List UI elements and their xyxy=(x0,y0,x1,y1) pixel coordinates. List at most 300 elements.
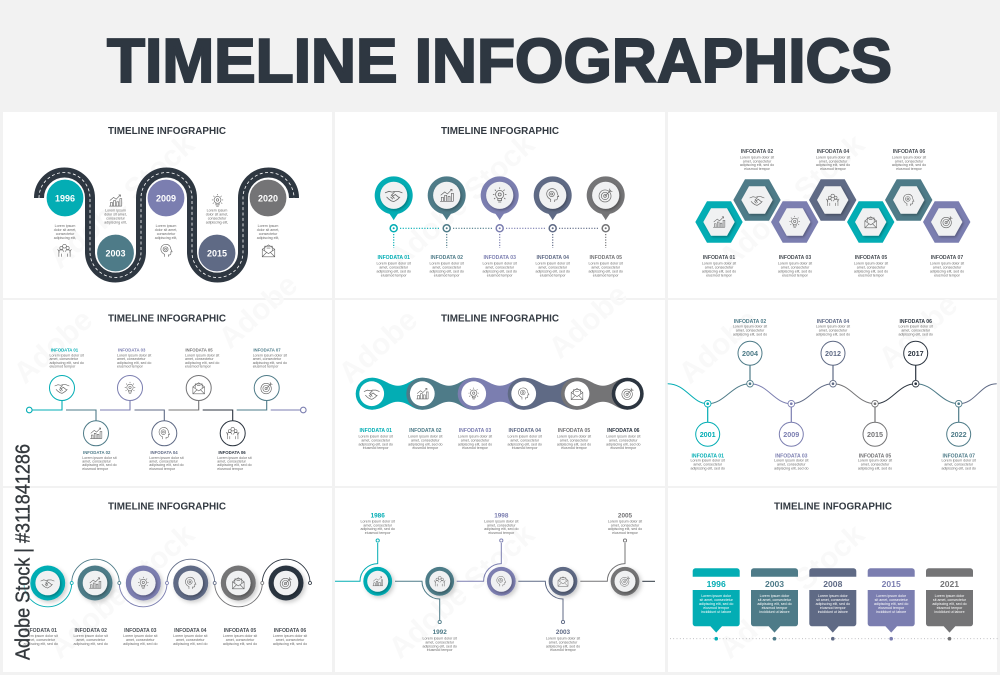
card 5: sit amet, consectetur xyxy=(933,598,967,602)
panel: stepped line timeline xyxy=(3,268,332,486)
infodata labels: INFODATA 01 xyxy=(24,628,57,634)
text blocks: Lorem ipsum dolor sit xyxy=(50,354,84,358)
infodata labels xyxy=(377,255,622,261)
text blocks: amet, consectetur xyxy=(861,463,890,467)
infodata labels: INFODATA 04 xyxy=(508,428,541,434)
timeline nodes xyxy=(390,225,609,232)
text blocks: Lorem ipsum dolor sit xyxy=(854,262,888,266)
text blocks: eiusmod tempor xyxy=(934,274,961,278)
card 1: sit amet, consectetur xyxy=(700,598,734,602)
infodata labels: INFODATA 01 xyxy=(51,348,79,353)
text blocks: adipiscing elit, sed do xyxy=(606,442,640,446)
infodata labels: INFODATA 02 xyxy=(741,149,773,155)
year circles xyxy=(696,341,971,446)
text blocks: Lorem ipsum dolor sit xyxy=(778,262,812,266)
text blocks: Lorem ipsum dolor sit xyxy=(24,634,58,638)
stepped line segments xyxy=(32,401,300,421)
text blocks: adipiscing elit, sed do xyxy=(117,361,151,365)
stems xyxy=(708,365,959,422)
text blocks xyxy=(702,156,964,278)
text blocks: adipiscing elit, sed do xyxy=(892,163,926,167)
text blocks: adipiscing elit, xyxy=(155,236,177,240)
text blocks: eiusmod tempor xyxy=(185,365,212,369)
text blocks: Lorem ipsum dolor sit xyxy=(733,324,767,328)
text blocks: Lorem ipsum dolor sit xyxy=(899,324,933,328)
year labels: 2015 xyxy=(207,248,227,258)
text blocks: Lorem ipsum dolor sit xyxy=(149,456,184,460)
text blocks: Lorem ipsum xyxy=(258,224,278,228)
infodata labels: INFODATA 06 xyxy=(218,450,246,455)
text blocks: amet, consectetur xyxy=(819,328,848,332)
text blocks: amet, consectetur xyxy=(425,640,455,644)
text blocks: adipiscing elit, sed do xyxy=(930,270,964,274)
text blocks: Lorem ipsum dolor sit xyxy=(223,634,257,638)
card 2: incididunt ut labore xyxy=(759,610,790,614)
text blocks: adipiscing elit, sed do xyxy=(608,527,642,531)
heading: TIMELINE INFOGRAPHIC xyxy=(108,500,226,512)
text blocks: Lorem ipsum dolor sit xyxy=(359,434,393,438)
text blocks: Lorem ipsum dolor sit xyxy=(423,637,457,641)
text blocks: consectetur xyxy=(208,216,227,220)
panel: wave timeline: Adobe xyxy=(873,288,964,375)
card 1: 1996 xyxy=(707,579,726,589)
text blocks: adipiscing elit, sed do xyxy=(430,270,464,274)
text blocks: adipiscing elit, xyxy=(54,236,76,240)
heading: TIMELINE INFOGRAPHIC xyxy=(774,500,892,512)
text blocks: eiusmod tempor xyxy=(612,531,639,535)
chain link 1 xyxy=(356,378,422,410)
text blocks xyxy=(54,208,279,240)
text blocks: dolor sit amet, xyxy=(206,212,228,216)
stock watermark id: Adobe Stock | #311841286 xyxy=(12,444,34,660)
title: TIMELINE INFOGRAPHICS xyxy=(107,27,892,96)
infodata labels: INFODATA 03 xyxy=(124,628,157,634)
text blocks: amet, consectetur xyxy=(510,438,540,442)
text blocks: Lorem ipsum dolor sit xyxy=(253,354,287,358)
card 1 xyxy=(693,568,740,640)
card 3 xyxy=(809,568,856,640)
card 4 xyxy=(868,568,915,640)
panel: chain timeline: Adobe xyxy=(543,278,634,365)
text blocks: dolor sit amet, xyxy=(257,228,279,232)
text blocks: amet, consectetur xyxy=(411,438,440,442)
text blocks: amet, consectetur xyxy=(591,266,621,270)
card 3: eiusmod tempor xyxy=(820,606,846,610)
text blocks: adipiscing elit, sed do xyxy=(458,442,492,446)
text blocks: eiusmod tempor xyxy=(412,446,439,450)
chain link 4 xyxy=(508,378,577,410)
infodata labels: INFODATA 05 xyxy=(589,255,622,261)
wave line xyxy=(668,384,997,404)
text blocks: adipiscing elit, xyxy=(206,220,228,224)
text blocks: adipiscing elit, sed do xyxy=(778,270,812,274)
year labels: 2005 xyxy=(618,513,633,520)
text blocks: Lorem ipsum dolor sit xyxy=(117,354,151,358)
card 5: adipiscing elit, sed do xyxy=(932,602,967,606)
infodata labels xyxy=(24,628,306,634)
card 2: 2003 xyxy=(765,579,784,589)
text blocks: adipiscing elit, sed do xyxy=(24,642,58,646)
text blocks: adipiscing elit, sed do xyxy=(50,361,84,365)
text blocks: Lorem ipsum dolor sit xyxy=(484,520,518,524)
panel: winding road timeline xyxy=(3,112,332,298)
panel: circles with arcs timeline xyxy=(3,488,332,672)
infodata labels: INFODATA 06 xyxy=(899,319,932,325)
text blocks: adipiscing elit, sed do xyxy=(483,270,517,274)
inner discs xyxy=(35,571,298,595)
card 2 xyxy=(751,568,798,640)
chain link 5 xyxy=(561,378,628,410)
text blocks: adipiscing elit, sed do xyxy=(74,642,108,646)
panel: card timeline xyxy=(668,488,998,672)
card 2: Lorem ipsum dolor xyxy=(760,594,790,598)
text blocks: Lorem ipsum dolor sit xyxy=(123,634,157,638)
text blocks: consectetur xyxy=(56,232,75,236)
card 3: adipiscing elit, sed do xyxy=(816,602,850,606)
text blocks: adipiscing elit, sed do xyxy=(508,442,542,446)
text blocks: eiusmod tempor xyxy=(512,446,538,450)
card 5: eiusmod tempor xyxy=(937,606,963,610)
text blocks: amet, consectetur xyxy=(743,159,772,163)
text blocks: eiusmod tempor xyxy=(782,274,809,278)
text blocks: eiusmod tempor xyxy=(427,648,453,652)
text blocks: amet, consectetur xyxy=(781,266,810,270)
text blocks: adipiscing elit, sed do xyxy=(484,527,518,531)
text blocks: amet, consectetur xyxy=(363,523,393,527)
infodata labels: INFODATA 03 xyxy=(459,428,491,434)
text blocks xyxy=(691,324,976,471)
year labels: 1986 xyxy=(371,513,385,520)
text blocks: Lorem ipsum dolor sit xyxy=(273,634,307,638)
text blocks: Lorem ipsum xyxy=(55,224,75,228)
infodata labels: INFODATA 06 xyxy=(893,149,925,155)
infodata labels: INFODATA 06 xyxy=(274,628,306,634)
text blocks: Lorem ipsum dolor sit xyxy=(942,459,976,463)
text blocks: amet, consectetur xyxy=(217,460,247,464)
panel: circles with arcs timeline: Adobe Stock xyxy=(43,518,201,665)
infodata labels: INFODATA 05 xyxy=(855,255,887,261)
year circles xyxy=(46,179,287,272)
text blocks: eiusmod tempor xyxy=(858,274,885,278)
text blocks xyxy=(361,520,642,652)
text blocks: amet, consectetur xyxy=(538,266,568,270)
text blocks: amet, consectetur xyxy=(777,463,806,467)
infodata labels: INFODATA 05 xyxy=(224,628,256,634)
text blocks: eiusmod tempor xyxy=(896,167,923,171)
text blocks: Lorem ipsum dolor sit xyxy=(377,262,411,266)
heading: TIMELINE INFOGRAPHIC xyxy=(108,312,226,324)
text blocks: Lorem ipsum dolor sit xyxy=(691,459,725,463)
text blocks: amet, consectetur xyxy=(226,638,255,642)
text blocks: amet, consectetur xyxy=(26,638,56,642)
infodata labels: INFODATA 02 xyxy=(74,628,107,634)
panel: winding road timeline: Adobe Stock xyxy=(43,128,201,275)
text blocks: Lorem ipsum dolor sit xyxy=(816,324,850,328)
card 5: incididunt ut labore xyxy=(934,610,965,614)
card 4: sit amet, consectetur xyxy=(875,598,909,602)
infodata labels: INFODATA 07 xyxy=(253,348,281,353)
year labels: 2012 xyxy=(825,349,841,358)
icons xyxy=(58,194,275,257)
text blocks: consectetur xyxy=(259,232,278,236)
text blocks: consectetur xyxy=(157,232,176,236)
text blocks: adipiscing elit, sed do xyxy=(361,527,395,531)
text blocks: amet, consectetur xyxy=(857,266,886,270)
text blocks: eiusmod tempor xyxy=(363,446,389,450)
infodata labels xyxy=(359,428,640,434)
text blocks xyxy=(377,262,623,278)
text blocks: adipiscing elit, sed do xyxy=(774,467,808,471)
text blocks: eiusmod tempor xyxy=(149,467,176,471)
text blocks: amet, consectetur xyxy=(549,640,578,644)
text blocks: eiusmod tempor xyxy=(434,274,460,278)
year labels: 2009 xyxy=(156,194,176,204)
text blocks: Lorem ipsum dolor sit xyxy=(608,520,642,524)
text blocks: amet, consectetur xyxy=(901,328,931,332)
card 1: adipiscing elit, sed do xyxy=(699,602,733,606)
panel: hexagon timeline: Adobe Stock xyxy=(713,128,871,275)
infodata labels: INFODATA 07 xyxy=(942,454,975,460)
panel: wave timeline: Adobe xyxy=(673,303,764,390)
card 2: sit amet, consectetur xyxy=(758,598,792,602)
text blocks: eiusmod tempor xyxy=(217,467,244,471)
text blocks: adipiscing elit, sed do xyxy=(854,270,888,274)
card 1: eiusmod tempor xyxy=(703,606,730,610)
text blocks: adipiscing elit, sed do xyxy=(557,442,591,446)
card 4: eiusmod tempor xyxy=(878,606,905,610)
text blocks: adipiscing elit, sed do xyxy=(702,270,736,274)
text blocks: amet, consectetur xyxy=(432,266,462,270)
year labels: 1996 xyxy=(55,194,75,204)
infodata labels: INFODATA 03 xyxy=(483,255,516,261)
text blocks: amet, consectetur xyxy=(485,266,515,270)
text blocks: consectetur xyxy=(106,216,126,220)
icons xyxy=(55,382,273,439)
text blocks xyxy=(24,634,307,646)
text blocks: adipiscing elit, sed do xyxy=(223,642,257,646)
panel: stepped line timeline: Adobe xyxy=(8,303,99,390)
card 3: Lorem ipsum dolor xyxy=(818,594,848,598)
text blocks: adipiscing elit, sed do xyxy=(123,642,157,646)
connecting arcs xyxy=(24,559,310,607)
text blocks: Lorem ipsum dolor sit xyxy=(430,262,464,266)
text blocks: Lorem ipsum dolor sit xyxy=(930,262,964,266)
line end nodes xyxy=(376,539,627,624)
text blocks: Lorem ipsum dolor sit xyxy=(173,634,207,638)
infodata labels: INFODATA 01 xyxy=(377,255,410,261)
infodata labels: INFODATA 03 xyxy=(118,348,146,353)
year labels: 2003 xyxy=(556,629,571,636)
line end points xyxy=(26,407,306,413)
infodata labels: INFODATA 03 xyxy=(779,255,811,261)
text blocks: Lorem ipsum xyxy=(156,224,176,228)
hexagon 5 xyxy=(847,201,894,243)
year labels xyxy=(55,194,278,258)
text blocks: eiusmod tempor xyxy=(820,167,847,171)
panel: branching line timeline: Adobe Stock xyxy=(383,518,541,665)
text blocks: Lorem ipsum dolor sit xyxy=(361,520,395,524)
text blocks: eiusmod tempor xyxy=(610,446,637,450)
text blocks: eiusmod tempor xyxy=(253,365,279,369)
panel: chain timeline: Adobe xyxy=(333,303,424,390)
year labels: 2003 xyxy=(105,248,126,258)
text blocks: eiusmod tempor xyxy=(550,648,577,652)
card 4: Lorem ipsum dolor xyxy=(876,594,907,598)
text blocks: amet, consectetur xyxy=(82,460,112,464)
text blocks: amet, consectetur xyxy=(50,357,79,361)
text blocks: amet, consectetur xyxy=(895,159,924,163)
card 3: incididunt ut labore xyxy=(818,610,848,614)
text blocks: Lorem ipsum dolor sit xyxy=(816,156,850,160)
infodata labels: INFODATA 02 xyxy=(734,319,766,325)
text blocks: amet, consectetur xyxy=(126,638,155,642)
heading: TIMELINE INFOGRAPHIC xyxy=(108,125,226,137)
panel: stepped line timeline: Adobe xyxy=(213,268,304,355)
infodata labels xyxy=(691,319,975,460)
infodata labels: INFODATA 02 xyxy=(83,450,111,455)
infodata labels: INFODATA 03 xyxy=(775,454,808,460)
year labels: 2022 xyxy=(951,430,967,439)
panel: wave timeline xyxy=(668,288,997,486)
pin 1 xyxy=(375,176,413,220)
panel: map pin timeline: Adobe Stock xyxy=(383,128,541,275)
hexagon 4 xyxy=(809,179,856,221)
infodata labels xyxy=(703,149,963,261)
text blocks: dolor sit amet, xyxy=(155,228,177,232)
card 4: 2015 xyxy=(882,579,901,589)
text blocks: eiusmod tempor xyxy=(488,531,515,535)
text blocks: Lorem ipsum dolor sit xyxy=(740,156,774,160)
text blocks: adipiscing elit, sed do xyxy=(359,442,393,446)
text blocks: eiusmod tempor xyxy=(117,365,144,369)
card 5 xyxy=(926,568,973,640)
hexagon 7 xyxy=(923,201,970,243)
text blocks: eiusmod tempor xyxy=(706,274,733,278)
heading: TIMELINE INFOGRAPHIC xyxy=(441,125,559,137)
text blocks: adipiscing elit, sed do xyxy=(217,463,252,467)
text blocks: eiusmod tempor xyxy=(540,274,566,278)
text blocks: Lorem ipsum dolor sit xyxy=(185,354,219,358)
text blocks: adipiscing elit, sed do xyxy=(185,361,219,365)
infodata labels: INFODATA 02 xyxy=(409,428,442,434)
text blocks: adipiscing elit, sed do xyxy=(536,270,570,274)
text blocks: eiusmod tempor xyxy=(593,274,619,278)
text blocks: adipiscing elit, sed do xyxy=(546,644,580,648)
panel: card timeline: Adobe Stock xyxy=(713,518,871,665)
text blocks: Lorem ipsum dolor sit xyxy=(892,156,926,160)
text blocks: eiusmod tempor xyxy=(50,365,76,369)
year labels: 1998 xyxy=(494,513,509,520)
card 1: incididunt ut labore xyxy=(701,610,731,614)
infodata labels: INFODATA 04 xyxy=(536,255,569,261)
dotted connectors xyxy=(394,228,606,248)
text blocks: adipiscing elit, xyxy=(104,220,127,224)
text blocks: adipiscing elit, sed do xyxy=(377,270,411,274)
text blocks: adipiscing elit, sed do xyxy=(942,467,976,471)
text blocks: adipiscing elit, sed do xyxy=(899,332,933,336)
outer discs xyxy=(363,567,639,596)
infodata labels: INFODATA 01 xyxy=(703,255,735,261)
infodata labels: INFODATA 04 xyxy=(817,149,849,155)
text blocks: eiusmod tempor xyxy=(462,446,489,450)
text blocks: eiusmod tempor xyxy=(82,467,109,471)
text blocks: Lorem ipsum dolor sit xyxy=(408,434,442,438)
text blocks: eiusmod tempor xyxy=(561,446,588,450)
text blocks: adipiscing elit, sed do xyxy=(858,467,892,471)
infodata labels: INFODATA 04 xyxy=(150,450,178,455)
text blocks: Lorem ipsum dolor sit xyxy=(557,434,591,438)
road xyxy=(39,172,294,278)
text blocks: amet, consectetur xyxy=(176,638,205,642)
text blocks: Lorem ipsum dolor sit xyxy=(702,262,736,266)
text blocks: amet, consectetur xyxy=(611,523,640,527)
card 5: 2021 xyxy=(940,579,959,589)
text blocks: amet, consectetur xyxy=(693,463,723,467)
panel: hexagon timeline xyxy=(668,112,997,298)
horizontal and arc lines xyxy=(335,543,655,620)
dotted baseline xyxy=(670,638,998,640)
text blocks: Lorem ipsum dolor sit xyxy=(774,459,808,463)
infodata labels: INFODATA 01 xyxy=(359,428,392,434)
pin 5 xyxy=(587,176,625,220)
text blocks: Lorem ipsum dolor sit xyxy=(536,262,570,266)
icons xyxy=(373,576,630,586)
text blocks: dolor sit amet, xyxy=(104,212,127,216)
card 3: 2008 xyxy=(823,579,843,589)
text blocks: amet, consectetur xyxy=(487,523,516,527)
infodata labels: INFODATA 04 xyxy=(817,319,849,325)
text blocks: adipiscing elit, sed do xyxy=(423,644,457,648)
card 5: Lorem ipsum dolor xyxy=(935,594,965,598)
text blocks: amet, consectetur xyxy=(461,438,490,442)
hexagon 6 xyxy=(885,179,932,221)
text blocks: amet, consectetur xyxy=(560,438,589,442)
text blocks: amet, consectetur xyxy=(379,266,409,270)
heading: TIMELINE INFOGRAPHIC xyxy=(441,312,559,324)
outer discs xyxy=(30,566,303,600)
hexagon 3 xyxy=(771,201,818,243)
text blocks: amet, consectetur xyxy=(117,357,146,361)
text blocks: Lorem ipsum dolor sit xyxy=(858,459,892,463)
text blocks: adipiscing elit, sed do xyxy=(691,467,725,471)
text blocks: adipiscing elit, xyxy=(257,236,279,240)
text blocks: adipiscing elit, sed do xyxy=(408,442,442,446)
text blocks: adipiscing elit, sed do xyxy=(82,463,117,467)
text blocks: adipiscing elit, sed do xyxy=(589,270,623,274)
infodata labels xyxy=(51,348,281,455)
text blocks: adipiscing elit, sed do xyxy=(733,332,767,336)
text blocks: amet, consectetur xyxy=(149,460,179,464)
infodata labels: INFODATA 05 xyxy=(558,428,590,434)
text blocks: adipiscing elit, sed do xyxy=(173,642,207,646)
inner discs xyxy=(367,571,636,592)
year labels: 2017 xyxy=(908,349,924,358)
icons xyxy=(364,388,634,400)
text blocks: dolor sit amet, xyxy=(54,228,76,232)
text blocks: Lorem ipsum dolor sit xyxy=(589,262,623,266)
text blocks: Lorem ipsum xyxy=(105,208,126,212)
chain link 6 xyxy=(612,378,644,410)
text blocks: adipiscing elit, sed do xyxy=(253,361,287,365)
infodata labels: INFODATA 07 xyxy=(931,255,963,261)
text blocks: amet, consectetur xyxy=(609,438,638,442)
card 3: sit amet, consectetur xyxy=(816,598,850,602)
text blocks: Lorem ipsum dolor sit xyxy=(546,637,580,641)
text blocks: eiusmod tempor xyxy=(487,274,513,278)
text blocks: adipiscing elit, sed do xyxy=(816,332,850,336)
text blocks: amet, consectetur xyxy=(933,266,962,270)
text blocks: Lorem ipsum dolor sit xyxy=(458,434,492,438)
